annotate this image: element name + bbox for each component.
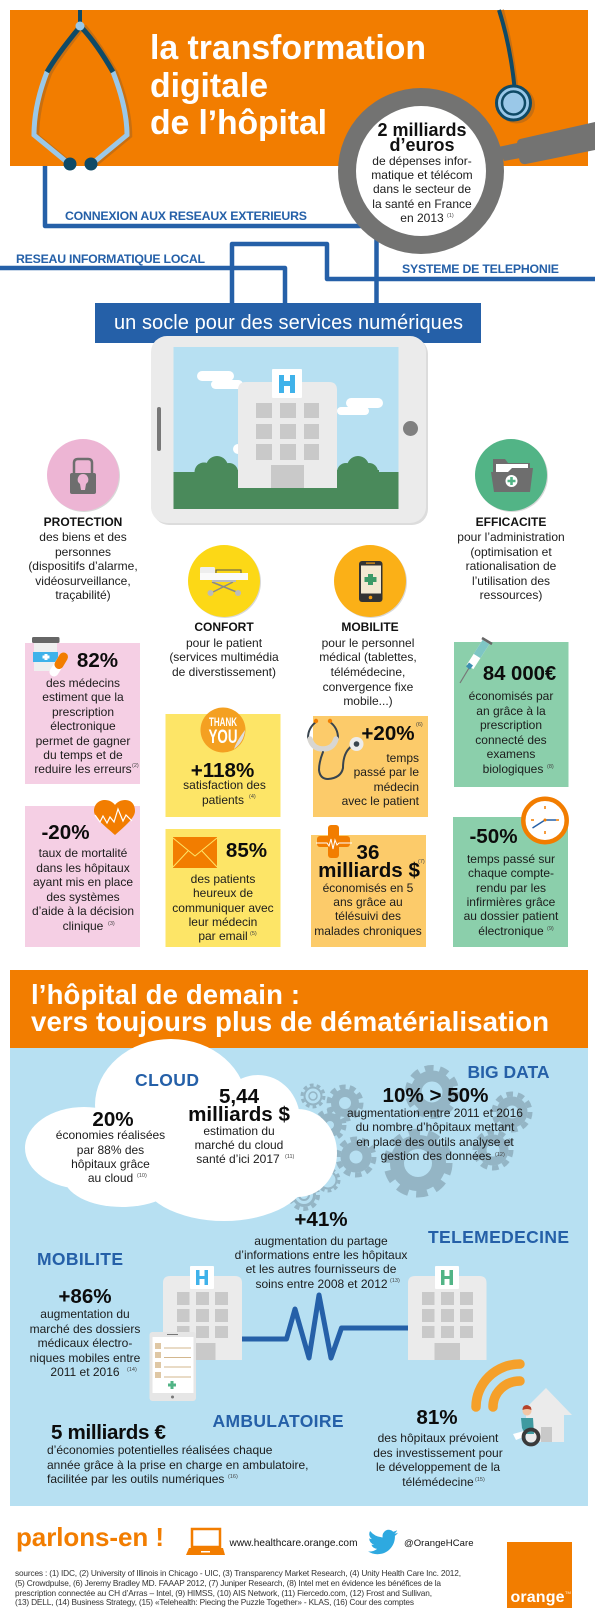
section: mobilite text: marché des dossiers xyxy=(30,1322,140,1336)
+20% description: avec le patient xyxy=(342,794,420,808)
-20% description: dans les hôpitaux xyxy=(36,861,130,875)
-20% description: clinique xyxy=(63,919,104,933)
panel: efficacite xyxy=(457,439,565,602)
-50% description: infirmières grâce xyxy=(467,895,556,909)
82% description: reduire les erreurs xyxy=(34,762,132,776)
icon: clock xyxy=(523,799,567,842)
-20% description: taux de mortalité xyxy=(39,846,128,860)
36 milliards description xyxy=(314,881,422,938)
section: ambulatoire text: AMBULATOIRE xyxy=(212,1411,344,1431)
callout text: matique et télécom xyxy=(371,168,473,182)
section: big data text: gestion des données xyxy=(381,1149,491,1163)
orange logo: orange xyxy=(510,1589,565,1606)
section: cloud text: estimation du xyxy=(203,1124,275,1138)
callout text: 2 milliards xyxy=(377,120,467,140)
-50% description: au dossier patient xyxy=(464,909,559,923)
section: 81% text: le développement de la xyxy=(376,1460,500,1474)
section: ambulatoire text: année grâce à la prise en charge en ambulatoire, xyxy=(47,1458,309,1472)
-50% description: (9) xyxy=(547,926,554,932)
cloud xyxy=(25,1039,337,1221)
section: big data text: BIG DATA xyxy=(468,1062,550,1082)
title xyxy=(150,29,426,142)
stat card: -20% xyxy=(25,800,140,947)
hospital sign xyxy=(272,369,302,398)
icon: padlock xyxy=(47,439,120,512)
+20% description: médecin xyxy=(374,780,419,794)
efficacite text: EFFICACITE xyxy=(476,515,546,529)
sources: (13) DELL, (14) Business Strategy, (15) «Telehealth: Piecing the Puzzle Together» - KLAS, (16) Cour des comptes xyxy=(15,1597,414,1607)
85% description: communiquer avec xyxy=(172,901,274,915)
section: big data text: en place des outils analyse et xyxy=(356,1135,514,1149)
efficacite text: l’utilisation des xyxy=(472,574,550,588)
section: ambulatoire text: (16) xyxy=(228,1474,238,1480)
82% description: (2) xyxy=(132,763,139,769)
section: 81% text xyxy=(373,1406,503,1489)
+20% description: passé par le xyxy=(354,765,419,779)
82% description: électronique xyxy=(50,719,116,733)
icon: magnifying glass callout xyxy=(338,88,595,254)
section: 81% text: des investissement pour xyxy=(373,1446,503,1460)
stat card: 36 milliards: 36 xyxy=(357,841,379,864)
section: telemedecine partage text: et les autres fournisseurs de xyxy=(246,1262,397,1276)
-20% description: ayant mis en place xyxy=(33,875,133,889)
-20% description xyxy=(32,846,134,933)
84 000€ description: (8) xyxy=(547,764,554,770)
callout text: d’euros xyxy=(389,135,455,155)
84 000€ description: an grâce à la xyxy=(476,704,546,718)
trees xyxy=(194,456,379,482)
heading: socle: un socle pour des services numériques xyxy=(114,312,463,334)
section: cloud text: milliards $ xyxy=(188,1103,290,1126)
callout text xyxy=(371,120,473,225)
section: mobilite text: (14) xyxy=(127,1367,137,1373)
mobilite text: pour le personnel xyxy=(322,636,414,650)
stat card: 85%: 85% xyxy=(226,839,267,862)
icon: syringe xyxy=(460,638,492,683)
85% description: (5) xyxy=(250,931,257,937)
mobilite text: convergence fixe xyxy=(323,680,414,694)
section: mobilite text: 2011 et 2016 xyxy=(50,1365,120,1379)
network connection lines xyxy=(0,160,595,304)
section: big data text: 10% > 50% xyxy=(383,1084,488,1107)
section: 81% text: télémédecine xyxy=(402,1475,474,1489)
callout text: dans le secteur de xyxy=(373,182,471,196)
stat card: 36 milliards: milliards $ xyxy=(318,859,420,882)
efficacite text: rationalisation de xyxy=(466,559,557,573)
sources: prescription connectée au CH d’Arras – Intel, (9) HIMSS, (10) AIS Network, (11) Fiercedo.com, (12) Frost and Sullivan, xyxy=(15,1588,432,1598)
82% description xyxy=(34,676,139,776)
confort text: CONFORT xyxy=(194,620,254,634)
stat card: 36 milliards xyxy=(311,825,426,947)
stat card: 84 000€ xyxy=(454,638,568,787)
section: cloud text: 5,44 xyxy=(219,1085,260,1108)
confort text: pour le patient xyxy=(186,636,263,650)
callout text: de dépenses infor- xyxy=(372,154,472,168)
section: telemedecine partage text: soins entre 2008 et 2012 xyxy=(255,1277,388,1291)
icon: twitter bird xyxy=(368,1530,398,1554)
-20% description: d’aide à la décision xyxy=(32,904,134,918)
stat card: 85% xyxy=(166,829,280,947)
confort text: de diverstissement) xyxy=(172,665,276,679)
tablet speaker slot xyxy=(157,407,161,451)
85% description: leur médecin xyxy=(189,915,257,929)
sources: sources : (1) IDC, (2) University of Illinois in Chicago - UIC, (3) Transparency Market Research, (4) Unity Health Care Inc. 2012, xyxy=(15,1568,461,1578)
protection text xyxy=(28,515,138,602)
icon: laptop xyxy=(186,1529,225,1555)
heading: telemedecine: TELEMEDECINE xyxy=(428,1227,569,1247)
section: telemedecine partage text: (13) xyxy=(390,1278,400,1284)
-20% description: des systèmes xyxy=(46,890,120,904)
heading: hopital de demain: l’hôpital de demain : xyxy=(31,979,300,1010)
efficacite text: (optimisation et xyxy=(470,545,552,559)
panel: confort xyxy=(169,545,279,679)
36 milliards description: économisés en 5 xyxy=(323,881,414,895)
heading: hopital de demain xyxy=(10,970,588,1048)
mobilite text xyxy=(319,620,417,708)
-50% description: chaque compte- xyxy=(468,866,554,880)
heading: socle xyxy=(95,303,481,343)
+20% description: temps xyxy=(386,751,419,765)
+118% description: (4) xyxy=(249,794,256,800)
stat card: 82% xyxy=(25,637,140,784)
section: ambulatoire text xyxy=(47,1411,344,1486)
+118% description: satisfaction des xyxy=(183,778,266,792)
section: 81% text: des hôpitaux prévoient xyxy=(378,1431,499,1445)
label: reseau informatique local: RESEAU INFORMATIQUE LOCAL xyxy=(16,252,205,266)
+20% description xyxy=(342,722,423,808)
section: ambulatoire text: 5 milliards € xyxy=(51,1421,167,1444)
icon: thank you sticker: YOU xyxy=(208,727,238,748)
stat card: 36 milliards: (7) xyxy=(418,859,425,865)
section: mobilite text xyxy=(30,1249,141,1379)
label: connexion aux reseaux exterieurs: CONNEXION AUX RESEAUX EXTERIEURS xyxy=(65,209,307,223)
stat card: +20% xyxy=(308,716,428,817)
icon: envelope xyxy=(173,837,217,868)
-50% description xyxy=(464,852,559,938)
icon: thank you sticker: THANK xyxy=(209,715,237,729)
section: telemedecine partage text xyxy=(235,1208,407,1291)
callout text: (1) xyxy=(447,213,454,219)
protection text: traçabilité) xyxy=(55,588,111,602)
section: ambulatoire text: facilitée par les outils numériques xyxy=(47,1472,224,1486)
section: cloud text: (11) xyxy=(285,1154,295,1160)
82% description: permet de gagner xyxy=(36,734,130,748)
efficacite text xyxy=(457,515,565,602)
orange logo: TM xyxy=(565,1590,571,1595)
confort text: (services multimédia xyxy=(169,650,279,664)
twitter handle: @OrangeHCare xyxy=(404,1538,474,1549)
82% description: prescription xyxy=(52,705,114,719)
section: cloud text: économies réalisées xyxy=(56,1128,165,1142)
section: mobilite text: +86% xyxy=(58,1285,112,1308)
stat card: -50%: -50% xyxy=(469,825,518,848)
84 000€ description xyxy=(469,689,554,776)
efficacite text: ressources) xyxy=(480,588,542,602)
-50% description: électronique xyxy=(478,924,544,938)
icon: wifi arcs xyxy=(476,1364,520,1407)
84 000€ description: prescription xyxy=(480,718,542,732)
icon: pills xyxy=(32,637,64,672)
efficacite text: pour l’administration xyxy=(457,530,565,544)
-50% description: rendu par les xyxy=(476,881,546,895)
section: 81% text: 81% xyxy=(416,1406,458,1429)
section: big data text: du nombre d’hôpitaux mettant xyxy=(356,1120,515,1134)
website link: www.healthcare.orange.com xyxy=(228,1538,358,1549)
panel: protection xyxy=(28,439,138,602)
stat card: -50% xyxy=(453,799,568,947)
mobilite text: télémédecine, xyxy=(331,665,405,679)
section: telemedecine partage text: d’informations entre les hôpitaux xyxy=(235,1248,407,1262)
82% description: des médecins xyxy=(46,676,120,690)
clouds xyxy=(197,371,383,454)
title: de l’hôpital xyxy=(150,104,327,142)
stat card: 82%: 82% xyxy=(77,649,118,672)
icon: stethoscope earpieces xyxy=(34,10,130,170)
mobilite text: médical (tablettes, xyxy=(319,650,417,664)
icon: smartphone xyxy=(334,545,407,618)
title: digitale xyxy=(150,67,268,105)
section: big data text xyxy=(347,1062,550,1163)
stat card: +118% xyxy=(166,708,280,817)
-50% description: temps passé sur xyxy=(467,852,555,866)
section: 81% text: (15) xyxy=(475,1477,485,1483)
icon: hospital bed xyxy=(188,545,261,618)
icon: medical cross with pulse xyxy=(316,825,352,858)
section: cloud text: au cloud xyxy=(88,1171,133,1185)
section: mobilite text: augmentation du xyxy=(40,1307,130,1321)
84 000€ description: économisés par xyxy=(469,689,553,703)
icon: left hospital xyxy=(163,1266,242,1360)
+20% description: (6) xyxy=(416,722,423,728)
section: big data text: (12) xyxy=(495,1152,505,1158)
36 milliards description: malades chroniques xyxy=(314,924,422,938)
36 milliards description: ans grâce au xyxy=(333,895,403,909)
stat card: -20%: -20% xyxy=(41,821,90,844)
+118% description xyxy=(183,778,266,807)
section: mobilite text: MOBILITE xyxy=(37,1249,123,1269)
-20% description: (3) xyxy=(108,921,115,927)
protection text: vidéosurveillance, xyxy=(35,574,131,588)
section: cloud text: par 88% des xyxy=(77,1143,144,1157)
icon: gears xyxy=(290,1068,530,1209)
icon: stethoscope chest piece xyxy=(496,10,535,124)
protection text: (dispositifs d’alarme, xyxy=(28,559,138,573)
stat card: +118%: +118% xyxy=(191,759,254,782)
protection text: des biens et des xyxy=(39,530,127,544)
callout text: la santé en France xyxy=(372,197,472,211)
82% description: estiment que la xyxy=(42,690,124,704)
tablet with hospital xyxy=(151,336,428,525)
tablet home button xyxy=(403,421,418,436)
heading: parlons-en: parlons-en ! xyxy=(16,1522,164,1552)
section: telemedecine partage text: +41% xyxy=(294,1208,348,1231)
icon: house and wheelchair patient xyxy=(513,1388,572,1444)
icon: medical folder xyxy=(475,439,548,512)
section: cloud text: (10) xyxy=(137,1173,147,1179)
section: ambulatoire text: d’économies potentielles réalisées chaque xyxy=(47,1443,273,1457)
sources: (5) Crowdpulse, (6) Jeremy Bradley MD. FAAAP 2012, (7) Juniper Research, (8) Intel met en évidence les bénéfices de la xyxy=(15,1578,441,1588)
section: telemedecine partage text: augmentation du partage xyxy=(254,1234,388,1248)
section: big data text: augmentation entre 2011 et 2016 xyxy=(347,1106,523,1120)
+118% description: patients xyxy=(202,793,244,807)
85% description: par email xyxy=(198,929,248,943)
icon: heart xyxy=(94,800,135,835)
orange logo xyxy=(507,1542,572,1608)
mobilite text: MOBILITE xyxy=(341,620,399,634)
section: cloud text: CLOUD xyxy=(135,1070,199,1090)
label: systeme de telephonie: SYSTEME DE TELEPHONIE xyxy=(402,262,559,276)
header banner xyxy=(10,10,588,166)
84 000€ description: biologiques xyxy=(483,762,543,776)
section: mobilite text: médicaux électro- xyxy=(38,1336,132,1350)
sources xyxy=(15,1568,461,1607)
84 000€ description: examens xyxy=(487,747,535,761)
icon: medical tablet xyxy=(150,1332,196,1401)
confort text xyxy=(169,620,279,679)
title: la transformation xyxy=(150,29,426,67)
section: cloud text: santé d’ici 2017 xyxy=(196,1152,280,1166)
icon: pulse line between hospitals xyxy=(242,1295,408,1358)
85% description: heureux de xyxy=(193,886,253,900)
protection text: personnes xyxy=(55,545,111,559)
section: cloud text: 20% xyxy=(92,1108,134,1131)
panel: hopital de demain background xyxy=(10,1048,588,1506)
hospital building xyxy=(238,382,337,488)
stat card: 84 000€: 84 000€ xyxy=(483,663,556,685)
icon: thank you sticker xyxy=(200,708,246,752)
85% description xyxy=(172,872,274,943)
85% description: des patients xyxy=(191,872,255,886)
36 milliards description: télésuivi des xyxy=(335,909,401,923)
panel: mobilite xyxy=(319,545,417,708)
82% description: du temps et de xyxy=(43,748,123,762)
callout text: en 2013 xyxy=(400,211,444,225)
section: cloud text: marché du cloud xyxy=(195,1138,283,1152)
section: cloud text: hôpitaux grâce xyxy=(71,1157,150,1171)
heading: hopital de demain: vers toujours plus de dématérialisation xyxy=(31,1006,549,1037)
stat card: +20%: +20% xyxy=(361,722,415,745)
protection text: PROTECTION xyxy=(44,515,122,529)
mobilite text: mobile...) xyxy=(343,694,393,708)
section: mobilite text: niques mobiles entre xyxy=(30,1351,141,1365)
icon: stethoscope xyxy=(308,719,364,779)
section: cloud text xyxy=(56,1070,295,1185)
icon: right hospital xyxy=(408,1266,486,1360)
84 000€ description: connecté des xyxy=(475,733,547,747)
